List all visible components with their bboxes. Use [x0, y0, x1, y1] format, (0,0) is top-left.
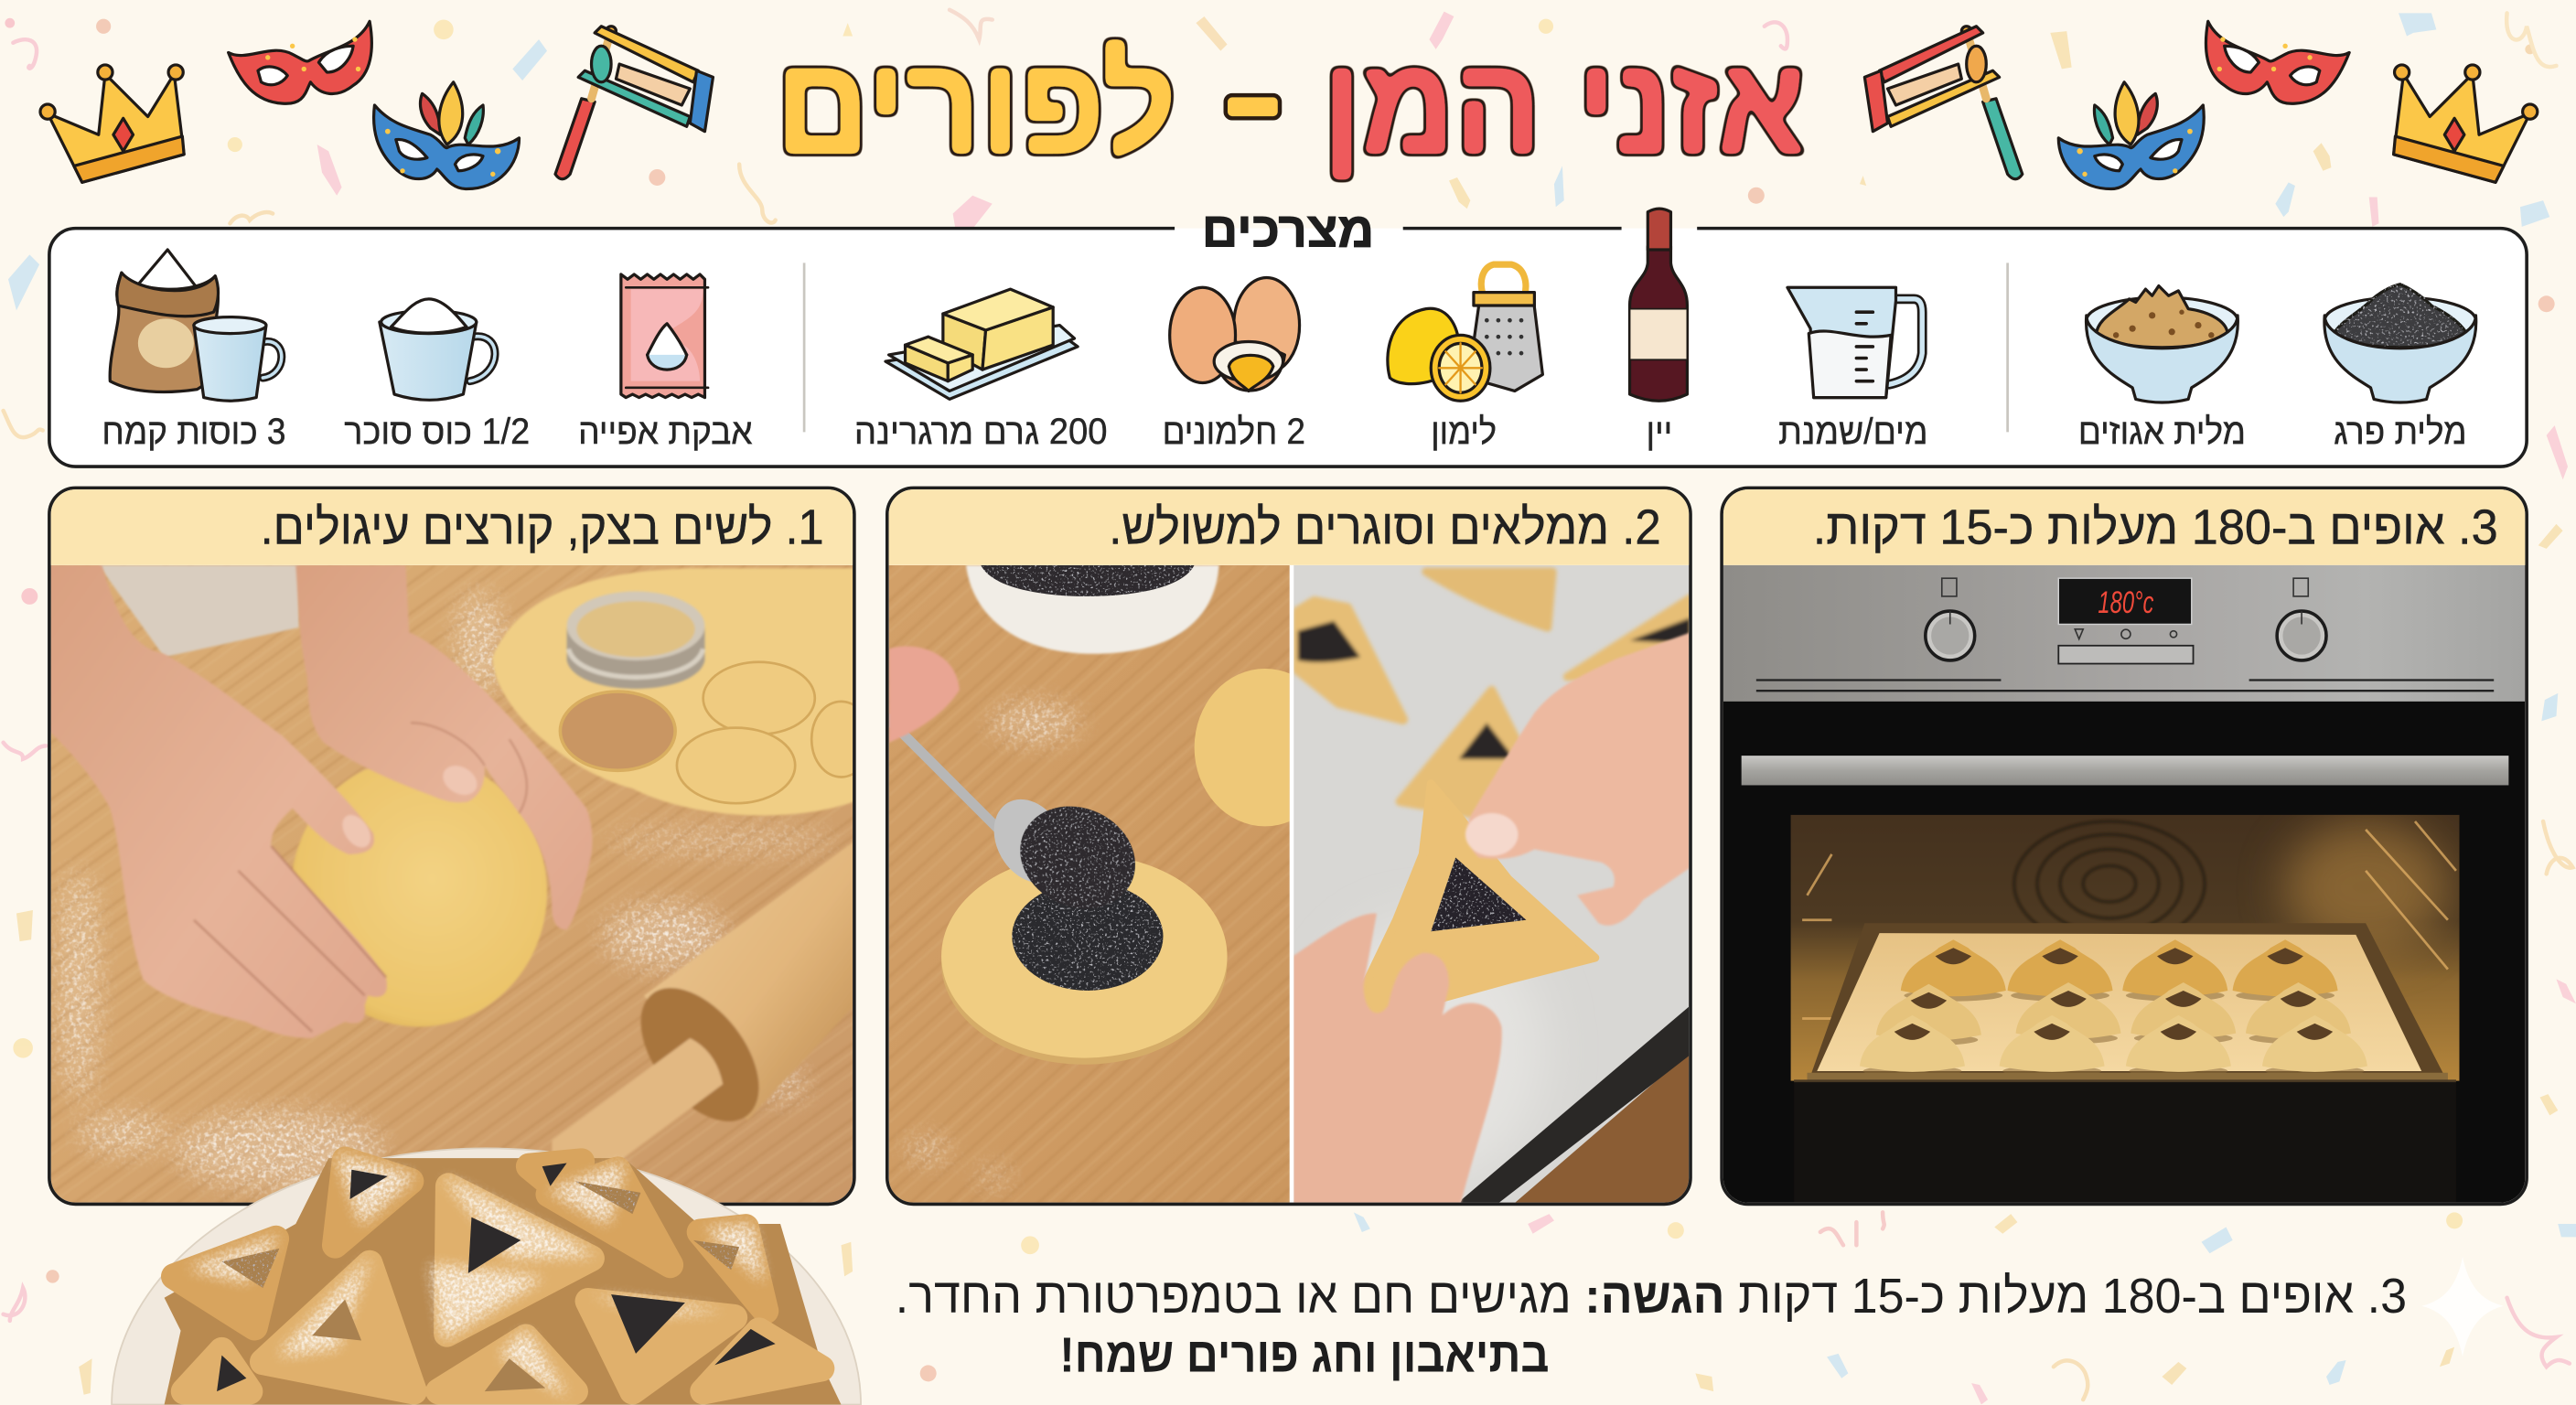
fillings back: [350, 1164, 567, 1199]
glow: [2283, 821, 2448, 953]
display: [2058, 578, 2192, 624]
icon: red mask left: [229, 21, 371, 103]
icon: margarine on dish: [886, 289, 1078, 399]
step 2 photo right: folding triangle: [1293, 565, 1690, 1206]
divider: [803, 263, 805, 432]
pastry back: [174, 1160, 766, 1327]
wood: [889, 565, 1292, 1206]
icon: blue feather mask right: [2058, 82, 2204, 189]
knob left: [1926, 611, 1975, 660]
pastries row 1: [1901, 939, 2338, 1002]
ingredient: sugar: [344, 299, 530, 452]
panel: step 3: [1722, 488, 2527, 1206]
pastries row 3: [1860, 1015, 2367, 1077]
dough disc: [941, 960, 1228, 1065]
icon: sugar mug: [380, 299, 495, 400]
panel: ingredients: [49, 202, 2527, 467]
step 1 photo: kneading dough: [49, 565, 871, 1206]
main pastry poppy: [1431, 857, 1526, 931]
ingredient: lemon: [1388, 264, 1542, 452]
rolled dough: [493, 568, 854, 816]
panel background: [49, 229, 2527, 467]
ingredient: wine: [1630, 209, 1687, 452]
step 3 header: [1723, 489, 2525, 565]
cut circles: [677, 662, 871, 803]
ingredient: water or cream: [1778, 287, 1928, 452]
wooden table: [49, 565, 854, 1206]
icon: gragger right: [1864, 27, 2023, 179]
background pastries: [1298, 572, 1690, 818]
heading: ingredients: מצרכים: [1202, 202, 1374, 257]
racks: [1802, 821, 2456, 1018]
serving line 2: בתיאבון וחג פורים שמח!: [1059, 1328, 1550, 1383]
icon: poppy bowl: [2324, 284, 2476, 402]
door handle: [1742, 756, 2508, 785]
window: [1791, 815, 2459, 1081]
flour dust: [62, 595, 838, 1186]
title: [776, 27, 1806, 182]
icon: crown right: [2394, 65, 2538, 182]
window frame lower: [1794, 1081, 2456, 1206]
title: yellow part: לפורים: [776, 27, 1176, 182]
label: מלית פרג: [2334, 412, 2467, 452]
plate of hamantaschen: [112, 1148, 861, 1405]
wood corner: [1511, 1051, 1690, 1206]
bowl with poppy: [966, 565, 1219, 654]
icon: crown left: [40, 65, 184, 182]
baking paper: [1293, 565, 1690, 1206]
label: אבקת אפייה: [578, 412, 753, 452]
ingredient: poppy filling: [2324, 284, 2476, 452]
fillings front: [217, 1217, 776, 1391]
sugar front: [279, 1176, 723, 1397]
ingredient: baking powder: [578, 274, 753, 452]
header band: [51, 489, 853, 565]
panel border: [49, 229, 2527, 467]
top hand: [1465, 632, 1690, 926]
temperature readout: 180°c: [2098, 585, 2153, 620]
icon: gragger left: [555, 27, 713, 179]
cookie cutter: [567, 592, 704, 689]
bowl poppy: [981, 565, 1195, 596]
label: 200 גרם מרגרינה: [854, 412, 1107, 452]
header band: [1723, 489, 2525, 565]
step 3 border: [1722, 488, 2527, 1204]
step 1 title: 1. לשים בצק, קורצים עיגולים.: [261, 499, 824, 554]
ingredient: margarine: [854, 289, 1107, 452]
tray: [1810, 923, 2444, 1076]
step 1 border: [49, 488, 854, 1204]
icon: eggs and yolk: [1170, 278, 1300, 391]
wood grain: [889, 565, 1292, 1206]
spoon: [887, 718, 999, 830]
plate: [112, 1148, 861, 1405]
icon: wine bottle: [1630, 209, 1687, 401]
ingredient: walnut filling: [2078, 285, 2246, 452]
label: יין: [1647, 412, 1672, 452]
label: לימון: [1431, 412, 1497, 452]
icon: walnut bowl: [2087, 285, 2238, 402]
header band: [889, 489, 1689, 565]
icon: flour sack and cup: [110, 250, 282, 401]
tray edge: [1459, 1005, 1690, 1206]
title: dash: [1226, 95, 1280, 118]
bottom hand: [1293, 913, 1502, 1204]
step 2 photos: [887, 565, 1690, 1206]
baking paper: [1817, 933, 2421, 1071]
ingredient: egg yolks: [1163, 278, 1305, 452]
backdrop behind table: [99, 565, 299, 657]
fan: [2014, 821, 2205, 946]
right hand: [295, 565, 593, 929]
panel: step 2: [887, 488, 1690, 1206]
label: מלית אגוזים: [2078, 412, 2246, 452]
small symbols: [1942, 578, 2308, 639]
step 3 photo: oven: [1722, 565, 2527, 1206]
title: red part: אזני המן: [1323, 27, 1806, 182]
divider: [2007, 263, 2009, 432]
oven body: [1722, 565, 2527, 1206]
spoon poppy: [1004, 788, 1152, 928]
pastry mound base: [165, 1158, 842, 1405]
fingers: [889, 646, 960, 743]
icon: measuring jug: [1787, 287, 1922, 398]
step 2 header: [889, 489, 1689, 565]
label: 1/2 כוס סוכר: [344, 412, 530, 452]
label: 2 חלמונים: [1163, 412, 1305, 452]
knob right: [2277, 611, 2326, 660]
label: מים/שמנת: [1778, 412, 1928, 452]
rolling pin: [552, 842, 854, 1184]
flour specks: [908, 706, 1078, 1183]
left hand: [49, 565, 387, 1038]
ingredient: flour: [102, 250, 285, 452]
label: 3 כוסות קמח: [102, 412, 285, 452]
vent lines: [1756, 681, 2494, 691]
sugar back: [189, 1155, 764, 1282]
panel: step 1: [49, 488, 871, 1206]
step 1 header: [51, 489, 853, 565]
button bar: [2058, 646, 2194, 664]
dough ball: [291, 757, 547, 1026]
serving text: [896, 1269, 2407, 1383]
step 2 title: 2. ממלאים וסוגרים למשולש.: [1109, 499, 1661, 554]
icon: lemon and grater: [1388, 264, 1542, 401]
main pastry: [1357, 784, 1595, 1015]
step 2 photo left: filling with poppy: [889, 565, 1290, 1202]
pastries row 2: [1876, 982, 2351, 1046]
wood grain: [49, 565, 854, 1206]
icon: sparkle: [2421, 1257, 2504, 1357]
white split: [1290, 565, 1293, 1206]
tray front: [1808, 1073, 2448, 1081]
poppy pile: [1012, 882, 1164, 991]
dough circle behind: [1195, 669, 1290, 827]
icon: baking powder packet: [621, 274, 708, 398]
step 3 title: 3. אופים ב-180 מעלות כ-15 דקות.: [1813, 499, 2498, 554]
serving line 1: 3. אופים ב-180 מעלות כ-15 דקות הגשה: מגישים חם או בטמפרטורת החדר.: [896, 1269, 2407, 1324]
control panel: [1722, 565, 2527, 702]
pastry front: [184, 1186, 821, 1391]
icon: blue feather mask left: [374, 82, 520, 189]
icon: red mask right: [2206, 21, 2349, 103]
cut hole: [560, 692, 675, 770]
step 2 border: [887, 488, 1690, 1204]
